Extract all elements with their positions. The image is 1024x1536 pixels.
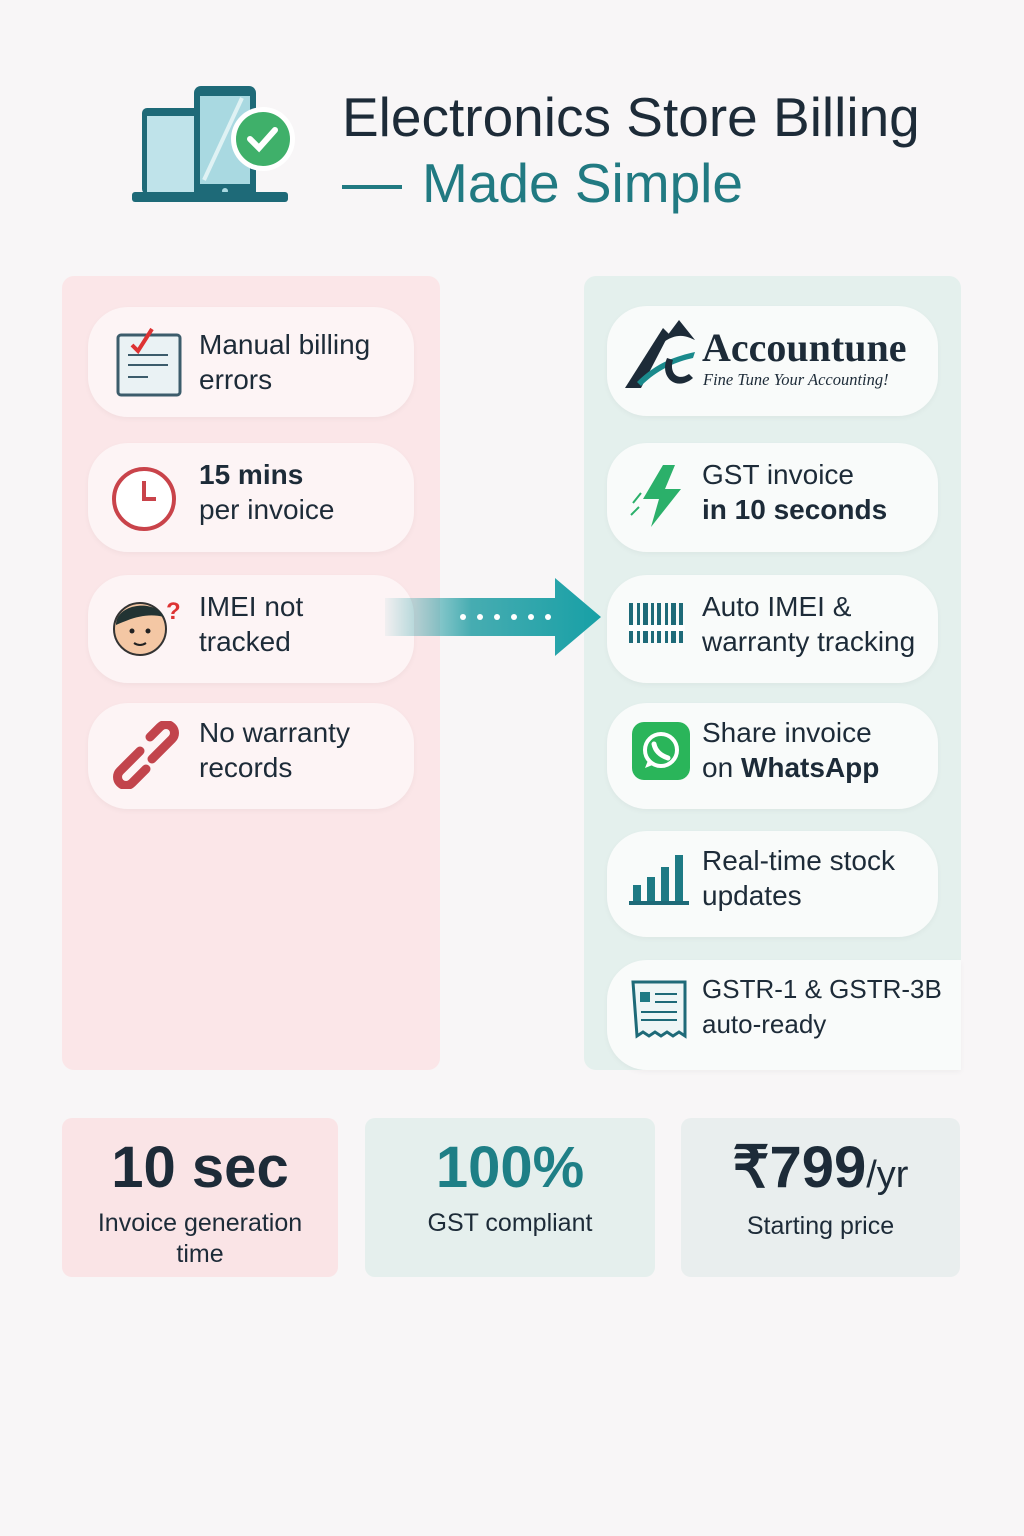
card: stock updates [607,831,938,937]
card: Accountune logo: Fine Tune Your Accounting! [703,370,889,389]
card: IMEI not tracked [88,575,414,683]
card: 15 mins: 15 mins [199,459,303,490]
stat: price: ₹799/yr [733,1135,908,1200]
card: WhatsApp: Share invoice [702,717,872,748]
card: auto IMEI: Auto IMEI & [702,591,851,622]
card: no warranty records: No warranty [199,717,350,748]
card: Accountune logo [607,306,938,416]
icon: bar chart [629,855,689,905]
stat: 10 sec [62,1118,338,1277]
card: Accountune logo: Accountune [702,325,906,370]
card: stock updates: updates [702,880,802,911]
stat: 100%: 100% [436,1135,584,1200]
card: no warranty records: records [199,752,292,783]
card: auto IMEI [607,575,938,683]
card: GSTR: GSTR-1 & GSTR-3B [702,974,942,1004]
card: 15 mins: per invoice [199,494,334,525]
card: GST invoice [607,443,938,552]
card: IMEI not tracked: IMEI not [199,591,303,622]
icon: broken chain [113,721,179,789]
icon: clock [112,467,176,531]
icon: AC logo [625,320,695,388]
card: GSTR [607,960,961,1070]
icon: devices with check [132,86,295,202]
title: Electronics Store Billing [342,86,920,148]
card: manual billing errors [88,307,414,417]
card: no warranty records [88,703,414,809]
panel: solutions [584,276,961,1070]
stat: price [681,1118,960,1277]
icon: clipboard [116,328,182,396]
panel: problems [62,276,440,1070]
card: GST invoice: in 10 seconds [702,494,887,525]
stat: price: Starting price [747,1212,894,1240]
icon: lightning [630,465,681,527]
card: WhatsApp [607,703,938,809]
card: IMEI not tracked: tracked [199,626,291,657]
card: manual billing errors: Manual billing [199,329,370,360]
title: Made Simple [422,152,743,214]
card: auto IMEI: warranty tracking [702,626,915,657]
icon: whatsapp [632,722,690,780]
card: 15 mins [88,443,414,552]
stat: 10 sec: Invoice generation [98,1209,302,1237]
card: GST invoice: GST invoice [702,459,854,490]
card: stock updates: Real-time stock [702,845,895,876]
stat: 10 sec: time [176,1240,224,1268]
arrow [385,578,601,656]
stat: 100% [365,1118,655,1277]
card: GSTR: auto-ready [702,1009,826,1039]
stat: 10 sec: 10 sec [111,1135,289,1200]
title [342,86,920,214]
icon: confused face: ? [166,598,181,625]
icon: barcode [629,603,683,643]
icon: confused face [113,598,181,656]
card: manual billing errors: errors [199,364,272,395]
stat: 100%: GST compliant [428,1209,592,1237]
icon: report document [631,980,686,1039]
card: WhatsApp: on WhatsApp [702,752,879,783]
